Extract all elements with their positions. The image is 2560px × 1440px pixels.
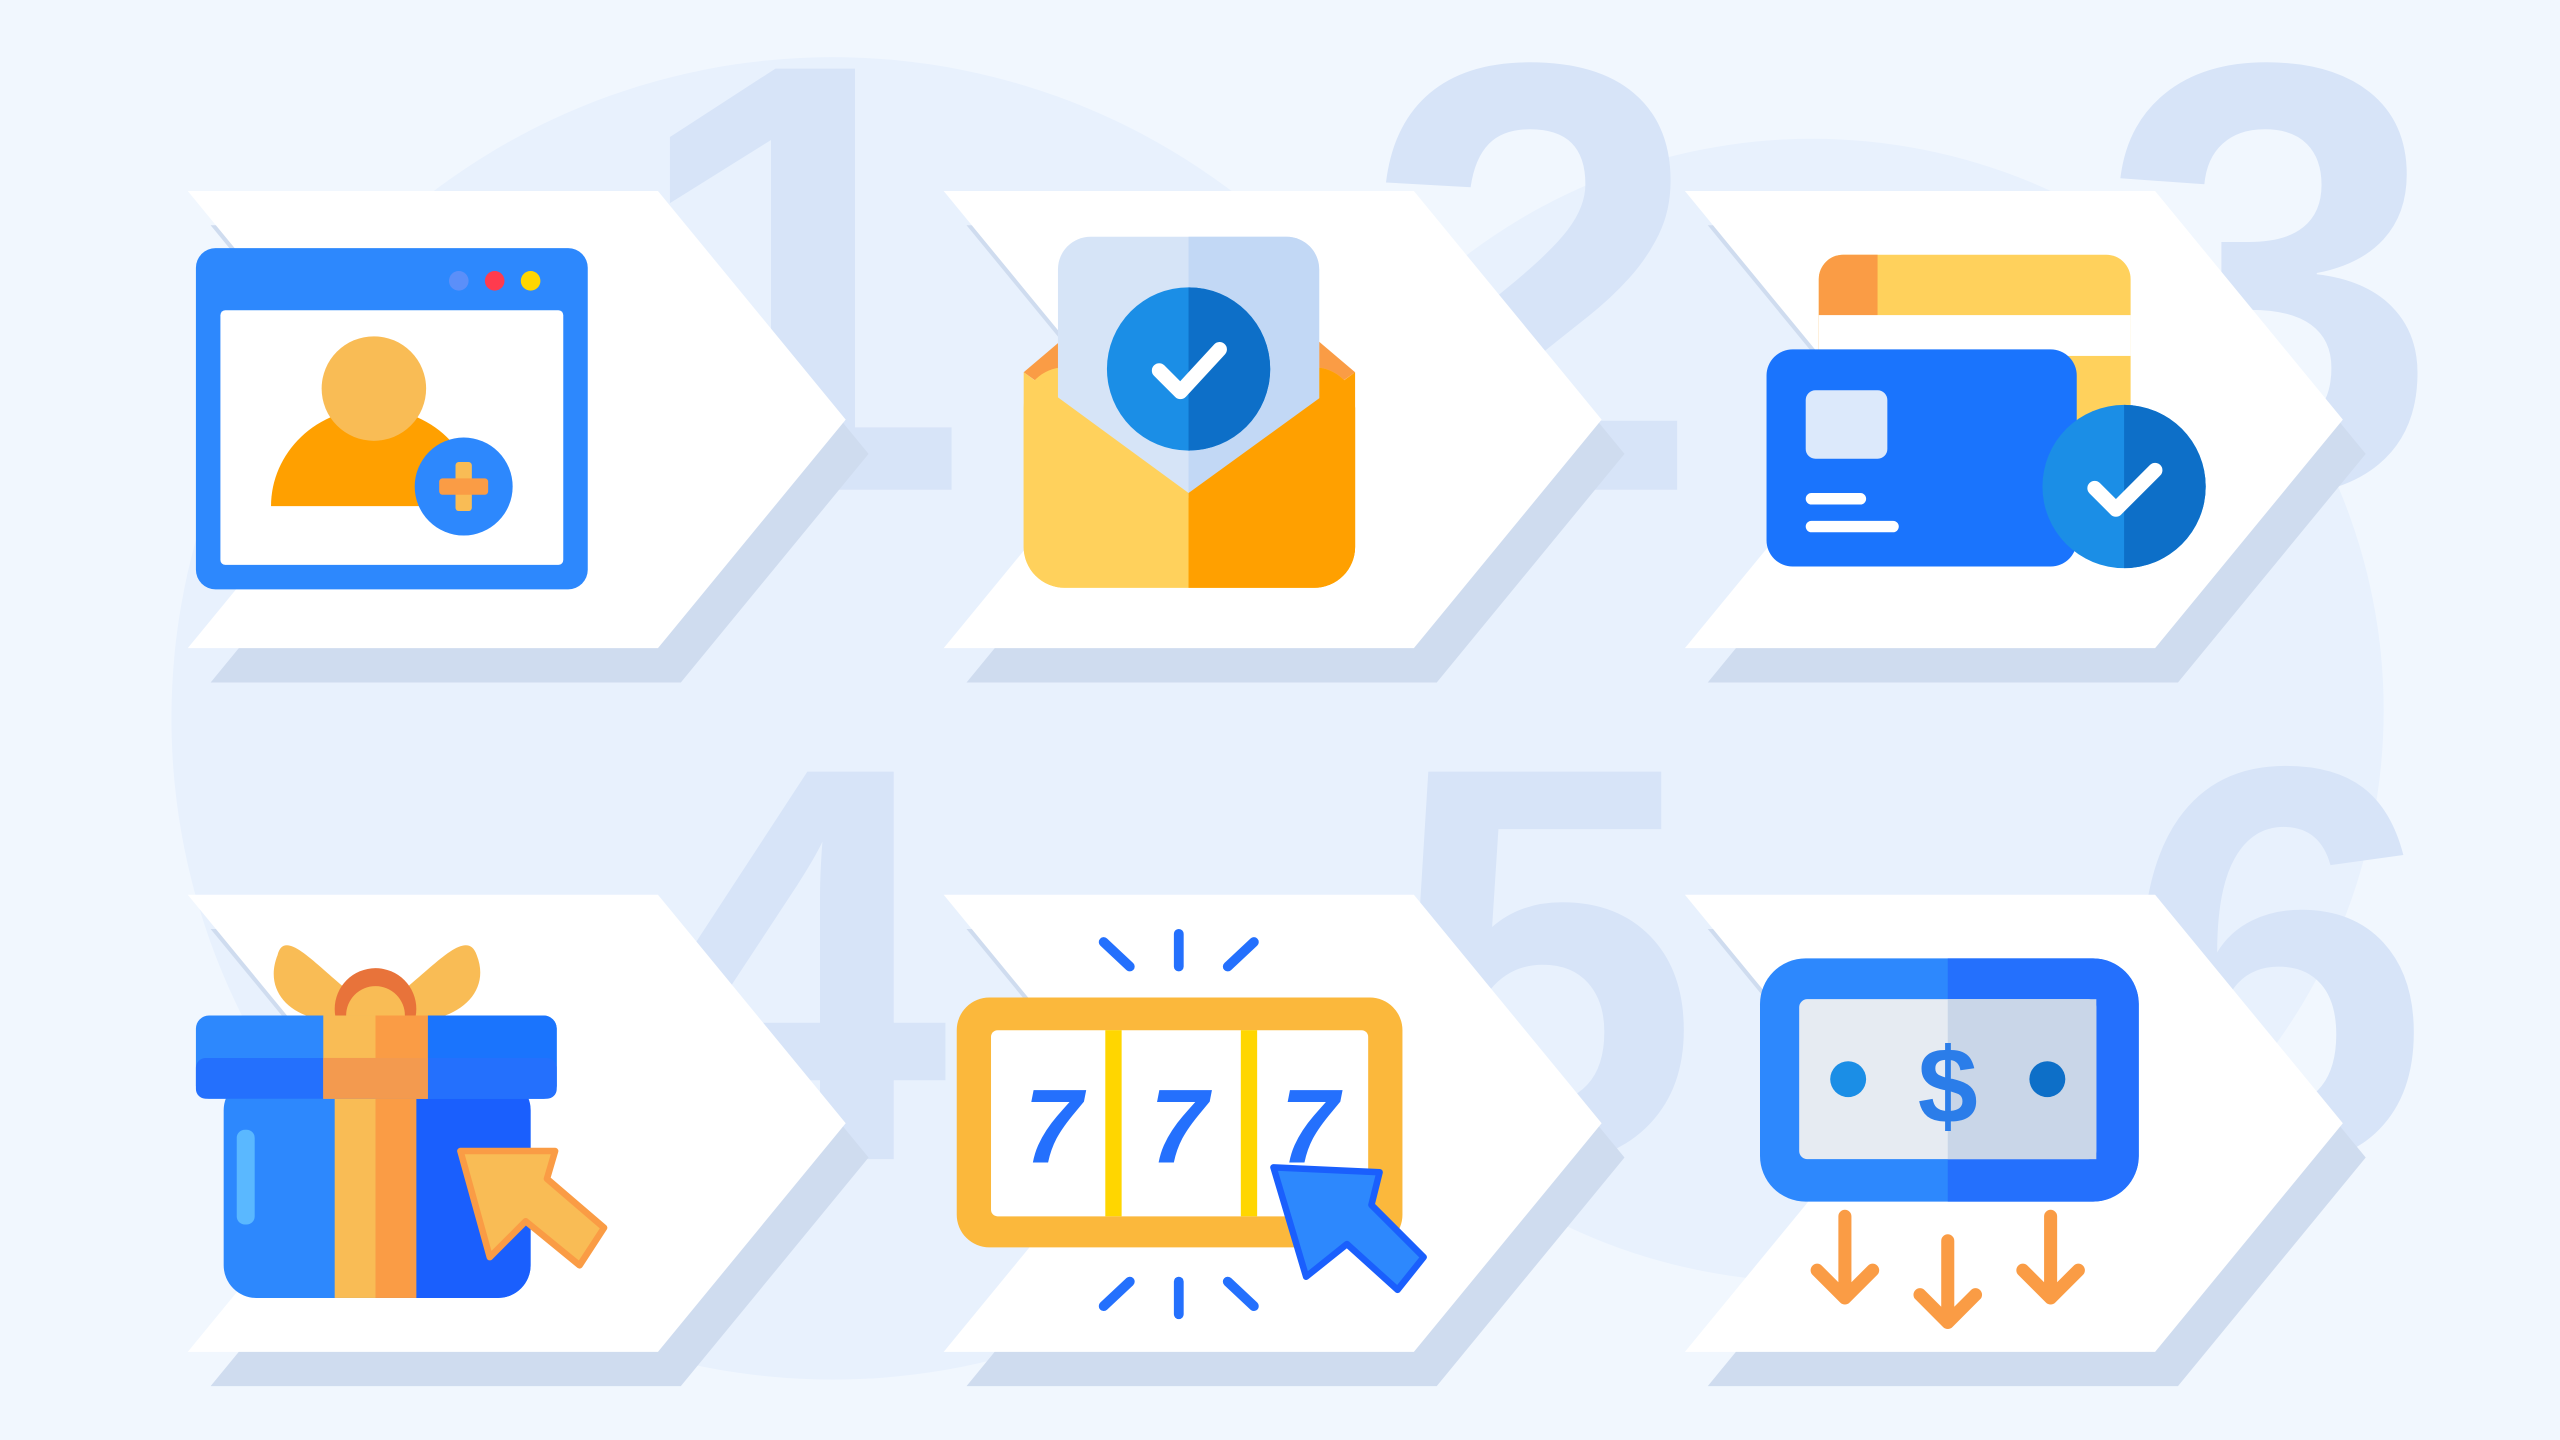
icon: gift xyxy=(196,945,604,1298)
icon: slot machine: 7 xyxy=(1024,1068,1087,1185)
icon: card check xyxy=(1767,255,2206,568)
icon: browser add user xyxy=(196,248,588,589)
icon: slot machine: 7 xyxy=(1280,1068,1343,1185)
panel 1 xyxy=(188,191,869,682)
icon: slot machine: 7 xyxy=(1150,1068,1213,1185)
panel 3 xyxy=(1685,191,2366,682)
panel 2 xyxy=(944,191,1624,682)
big numbers: 6 xyxy=(2121,650,2434,1279)
panel 4 xyxy=(188,895,869,1386)
big numbers xyxy=(628,0,2440,1279)
panel 5 xyxy=(944,895,1624,1386)
icon: envelope check xyxy=(1024,237,1355,588)
big numbers: 5 xyxy=(1386,650,1699,1279)
icon: money bill: $ xyxy=(1918,1025,1978,1146)
icon: money bill xyxy=(1760,958,2139,1322)
big numbers: 4 xyxy=(635,650,952,1279)
icon: slot machine xyxy=(957,934,1424,1314)
panel 6 xyxy=(1685,895,2366,1386)
